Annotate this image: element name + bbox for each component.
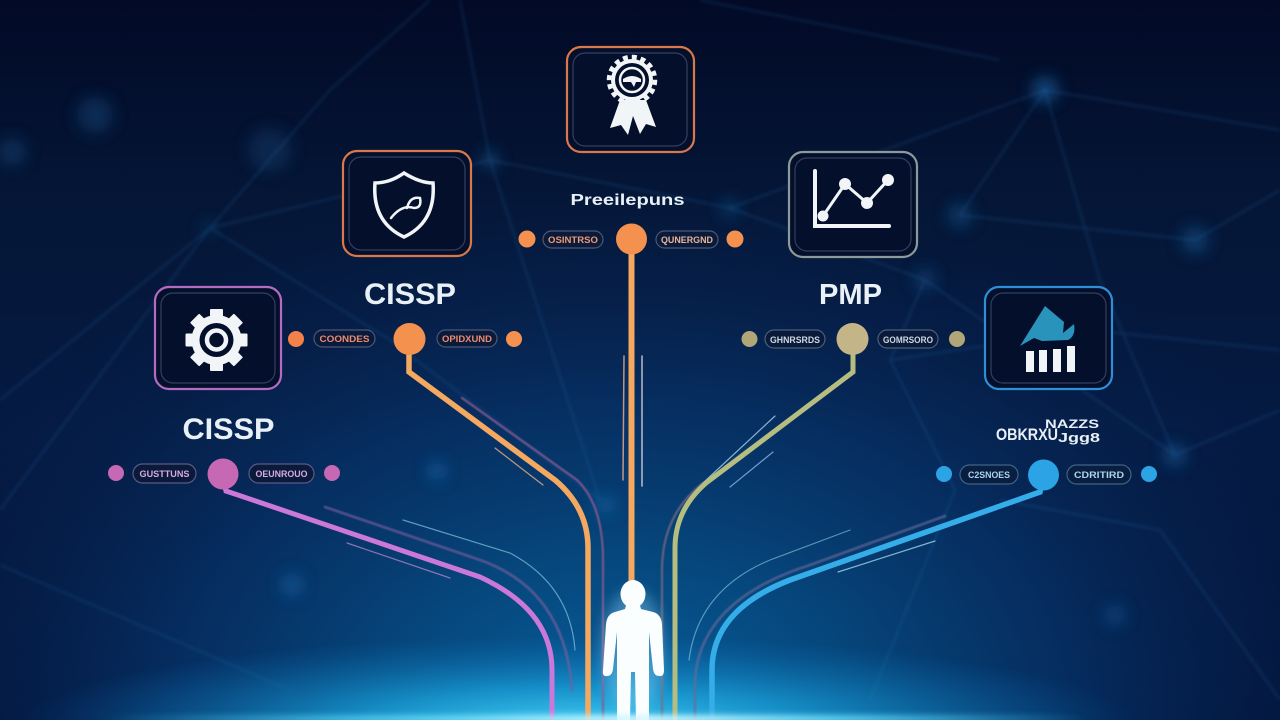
node row: olive bbox=[742, 323, 965, 355]
card: blue analytics bbox=[985, 287, 1112, 389]
node row: orange left bbox=[314, 323, 522, 355]
node row: blue bbox=[936, 460, 1157, 490]
connector: blue path bbox=[712, 476, 1043, 720]
background glows bbox=[0, 78, 1208, 626]
icon: gear bbox=[186, 309, 248, 371]
node row: centre: QUNERGND bbox=[661, 235, 713, 245]
node row: olive: GHNRSRDS bbox=[770, 335, 820, 345]
connector: orange left path bbox=[409, 342, 588, 720]
node row: purple: GUSTTUNS bbox=[140, 469, 190, 479]
icon: line chart bbox=[815, 171, 894, 226]
card: top ribbon certification bbox=[567, 47, 694, 152]
node row: blue: C2SNOES bbox=[968, 470, 1010, 480]
card: shield bbox=[343, 151, 471, 256]
node row: purple bbox=[108, 458, 340, 490]
heading: blue: NAZZS bbox=[1045, 417, 1099, 431]
node row: blue: CDRITIRD bbox=[1074, 470, 1125, 480]
icon: shield bbox=[375, 173, 433, 237]
bottom highlight bbox=[0, 715, 1280, 720]
connector: purple path bbox=[222, 476, 552, 720]
node row: orange left: COONDES bbox=[320, 334, 370, 344]
icon: award ribbon bbox=[609, 57, 656, 135]
heading: CISSP upper: CISSP bbox=[364, 278, 456, 311]
person figure bbox=[601, 580, 665, 720]
orange dot beside gear card bbox=[288, 331, 304, 347]
card: line chart bbox=[789, 152, 917, 257]
heading: centre: Preeilepuns bbox=[570, 192, 685, 209]
connector: olive path bbox=[675, 342, 853, 720]
heading: blue: Jgg8 bbox=[1058, 430, 1100, 445]
heading: blue: OBKRXU bbox=[996, 425, 1058, 444]
heading: PMP: PMP bbox=[819, 279, 882, 311]
node row: purple: OEUNROUO bbox=[256, 469, 308, 479]
bottom light glow bbox=[0, 620, 1280, 720]
card: gear bbox=[155, 287, 281, 389]
node row: centre bbox=[518, 224, 744, 254]
node row: orange left: OPIDXUND bbox=[442, 334, 493, 344]
connector accents: faint parallel streaks bbox=[325, 356, 945, 720]
connector: orange centre path bbox=[628, 240, 634, 582]
heading: blue bbox=[996, 417, 1100, 445]
node row: olive: GOMRSORO bbox=[883, 335, 933, 345]
heading: CISSP lower: CISSP bbox=[182, 413, 274, 446]
node row: centre: OSINTRSO bbox=[548, 235, 598, 245]
icon: mountain and bars bbox=[1020, 306, 1075, 372]
